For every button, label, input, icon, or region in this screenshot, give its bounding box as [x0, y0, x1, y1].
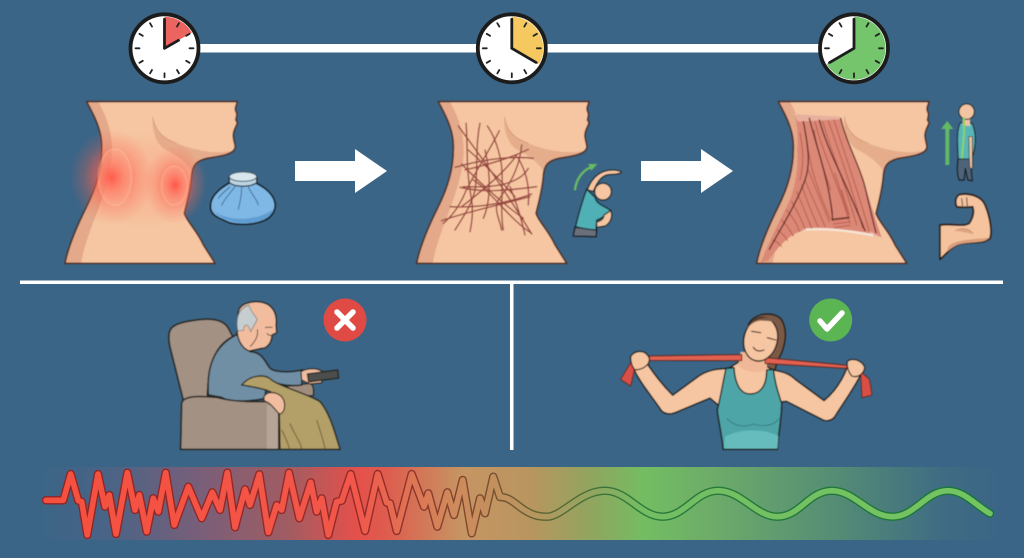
woman stretching with resistance band — [621, 314, 872, 449]
sedentary old man in armchair — [169, 302, 340, 449]
tangled fibre neck — [412, 100, 589, 265]
inflamed neck — [60, 100, 237, 265]
head — [237, 302, 277, 351]
timeline bar — [165, 44, 855, 52]
neck — [738, 352, 767, 372]
clock: early stage red — [130, 14, 198, 82]
icon: green check badge — [809, 298, 852, 342]
arrow: stage two to stage three — [641, 149, 733, 193]
clock: late stage green — [820, 14, 888, 82]
head — [739, 314, 782, 365]
armchair back — [169, 319, 233, 400]
blanket — [242, 376, 340, 449]
healed muscular neck — [752, 100, 929, 265]
divider vertical — [510, 283, 514, 450]
resistance band — [649, 355, 847, 368]
hands — [631, 351, 649, 370]
arrow: stage one to stage two — [295, 149, 387, 193]
divider horizontal — [20, 280, 1003, 284]
hair back — [748, 314, 785, 371]
hand and remote — [301, 369, 323, 384]
pain to calm waveform — [46, 473, 990, 535]
icon: ice pack — [211, 172, 275, 224]
gradient recovery band — [40, 467, 1000, 540]
armrest far side — [283, 383, 314, 397]
hand on armrest — [264, 393, 285, 414]
icon: flexed bicep — [940, 194, 991, 259]
band tails — [621, 361, 635, 386]
tank top — [717, 368, 782, 449]
icon: upright posture figure — [941, 104, 975, 181]
icon: stretching figure — [573, 164, 621, 237]
sweater — [208, 334, 303, 401]
clock: middle stage yellow — [478, 14, 546, 82]
icon: red cross badge — [324, 298, 366, 342]
arms and shoulders — [632, 361, 862, 421]
armchair seat — [181, 396, 278, 449]
